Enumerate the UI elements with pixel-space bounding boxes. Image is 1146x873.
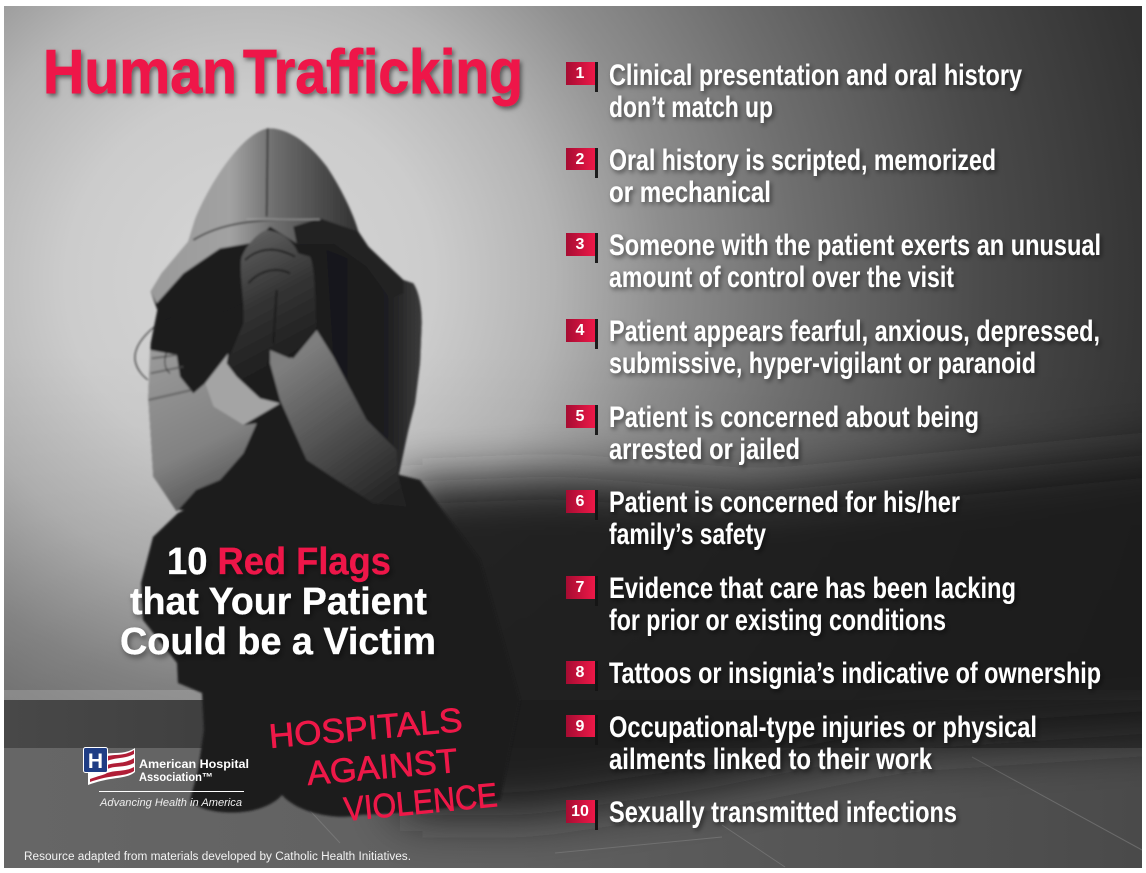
subtitle: 10 Red Flags that Your Patient Could be a Victim [120,541,436,663]
American Hospital Association logo: Advancing Health in America [99,797,242,809]
upper body and hood [135,128,422,512]
Hospitals Against Violence handwritten mark: AGAINST [305,742,459,793]
hair strands [135,280,243,380]
Hospitals Against Violence handwritten mark [267,701,499,829]
red flag item 6: family’s safety [609,518,766,551]
left cuff [205,353,280,425]
hood top [151,128,358,303]
red flag item 7: Evidence that care has been lacking [609,572,1016,605]
red flag item 5: 5 [576,408,585,425]
red flag item 9: Occupational-type injuries or physical [609,711,1037,744]
red flag item 3 [566,229,1101,294]
red flag item 10: Sexually transmitted infections [609,796,957,829]
Hospitals Against Violence handwritten mark: VIOLENCE [342,776,499,829]
red flag item 1: Clinical presentation and oral history [609,59,1022,92]
left sleeve [148,350,257,512]
American Hospital Association logo: American Hospital [139,759,249,771]
wall and floor shadow cast by the figure [400,450,1146,815]
right hood brim [293,218,403,298]
red flag item 2 [566,144,996,209]
red flag item 10: 10 [571,803,589,820]
red flag item 1: don’t match up [609,91,773,124]
red flag item 1 [566,59,1022,124]
red flag item 7 [566,572,1016,637]
red flag item 9 [566,711,1037,776]
red flag item 7: 7 [576,579,585,596]
red flag item 4: 4 [576,322,585,339]
red flag item 6: Patient is concerned for his/her [609,486,960,519]
subtitle: 10 Red Flags that Your Patient Could be a Victim: that Your Patient [130,581,427,623]
icon: flag with H: H [88,750,103,773]
title [43,38,523,107]
right shoulder [327,250,422,470]
red flag item 6 [566,486,960,551]
red flag item 4: submissive, hyper-vigilant or paranoid [609,347,1036,380]
red flag item 5: arrested or jailed [609,433,800,466]
American Hospital Association logo [84,748,249,809]
right sleeve [270,330,407,507]
red flag item 4 [566,315,1100,380]
red flag item 10 [566,796,957,830]
American Hospital Association logo: Association™ [139,772,213,784]
hands [227,230,317,400]
red flag item 5: Patient is concerned about being [609,401,979,434]
icon: flag with H [84,748,135,785]
red flag item 9: 9 [576,718,585,735]
red flag item 3: amount of control over the visit [609,261,954,294]
hood seams [267,128,268,217]
source note: Resource adapted from materials developed by Catholic Health Initiatives. [24,851,411,863]
red flag item 2: or mechanical [609,176,771,209]
red flag item 7: for prior or existing conditions [609,604,946,637]
red flag item 2: 2 [576,151,585,168]
Hospitals Against Violence handwritten mark: HOSPITALS [267,701,464,756]
red flag item 5 [566,401,979,466]
subtitle: 10 Red Flags that Your Patient Could be a Victim: Could be a Victim [120,621,436,663]
lower body silhouette [141,450,520,817]
title: Trafficking [243,38,523,107]
red flag item 9: ailments linked to their work [609,743,932,776]
title: Human [43,38,237,107]
photo: hooded figure [135,128,520,817]
red flag item 2: Oral history is scripted, memorized [609,144,996,177]
red flag item 1: 1 [576,65,585,82]
subtitle: 10 Red Flags that Your Patient Could be a Victim: 10 Red Flags [167,541,391,583]
red flag item 6: 6 [576,493,585,510]
red flag item 3: 3 [576,236,585,253]
red flag item 8: 8 [576,664,585,681]
